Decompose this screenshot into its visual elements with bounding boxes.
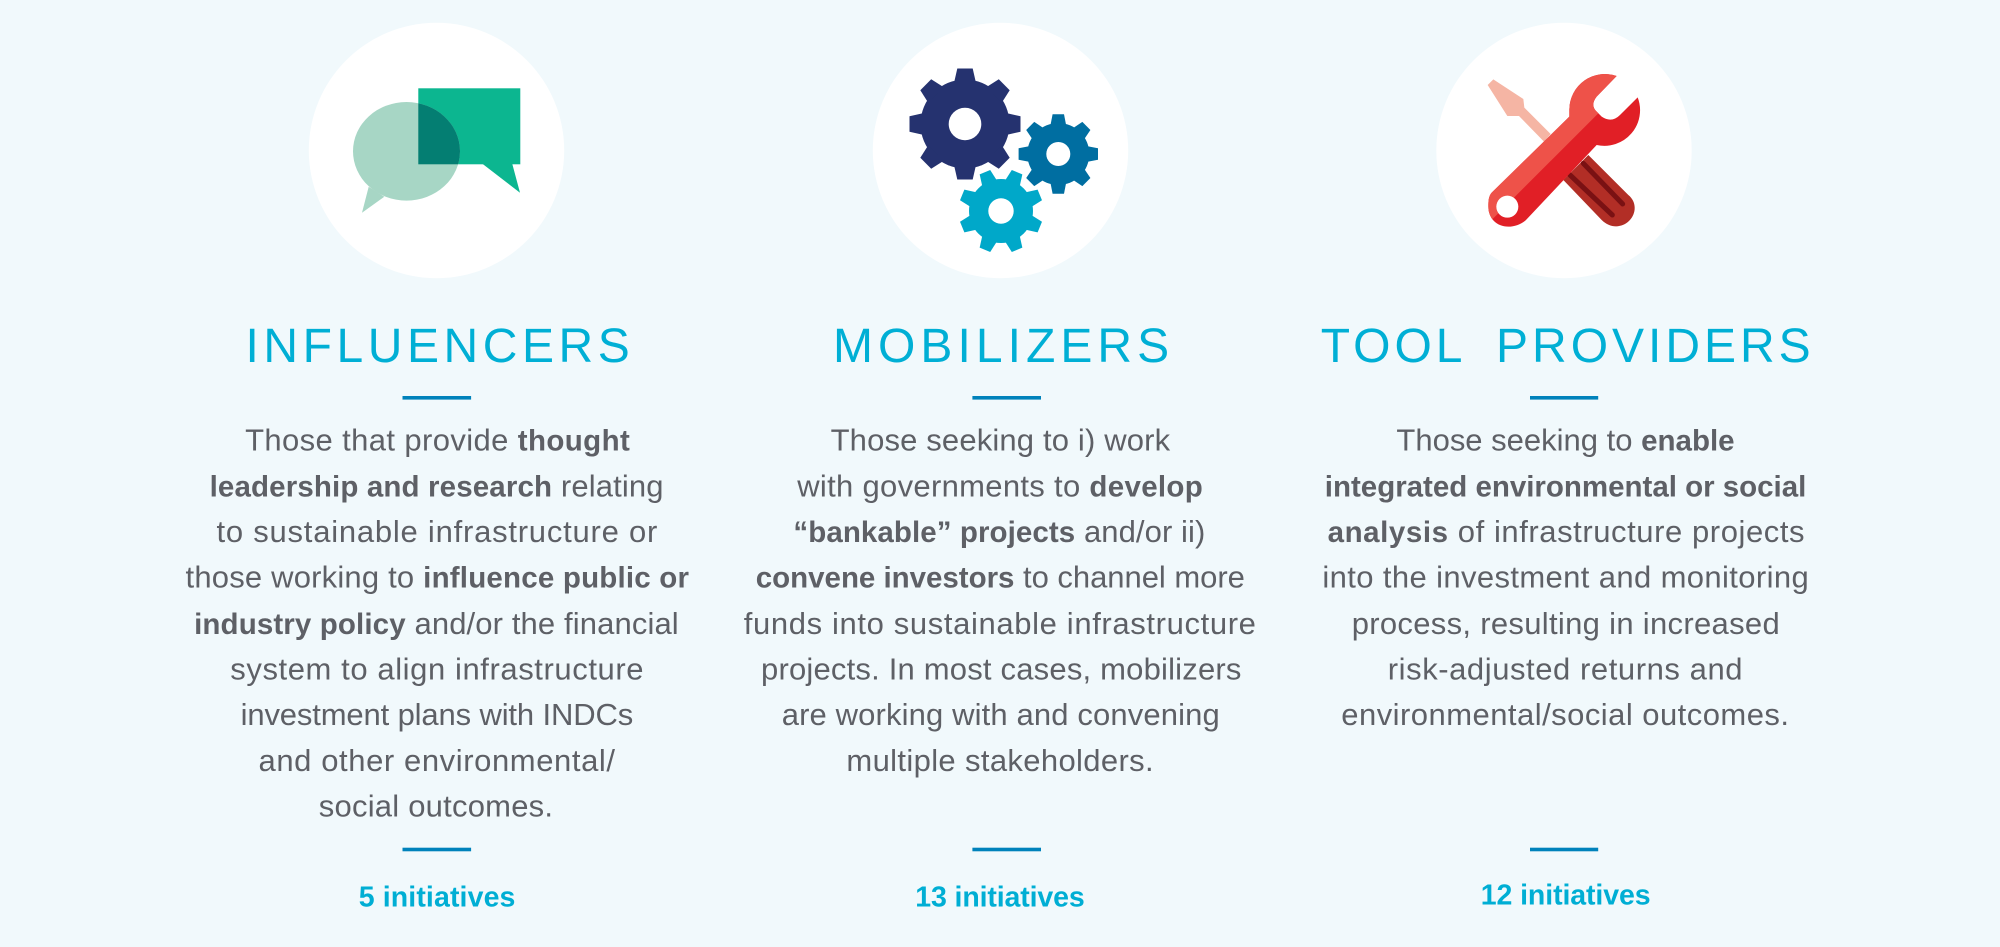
text block: mobilizers description — [744, 423, 1256, 778]
text block: influencers description: those working to influence public or — [186, 560, 690, 594]
text block: tool providers description — [1322, 423, 1809, 732]
heading: influencers: INFLUENCERS — [246, 320, 630, 373]
text block: influencers description: investment plans with INDCs — [241, 697, 633, 732]
icon: gears — [873, 23, 1128, 278]
screwdriver tip and shaft — [1488, 79, 1551, 142]
text block: influencers description: leadership and research relating — [210, 469, 664, 504]
icon: speech bubbles — [309, 23, 564, 278]
count: 5 initiatives: 5 initiatives — [359, 882, 515, 914]
text block: influencers description: system to align infrastructure — [230, 651, 644, 686]
text block: mobilizers description: funds into sustainable infrastructure — [744, 606, 1256, 641]
text block: influencers description: to sustainable infrastructure or — [216, 514, 657, 549]
text block: mobilizers description: are working with and convening — [782, 697, 1220, 732]
panel: mobilizers — [744, 23, 1256, 914]
large navy gear — [910, 68, 1020, 180]
text block: influencers description: Those that provide thought — [245, 423, 630, 458]
text block: mobilizers description: convene investors to channel more — [756, 560, 1245, 594]
text block: influencers description: industry policy and/or the financial — [194, 606, 679, 641]
heading: tool providers: TOOL PROVIDERS — [1321, 320, 1811, 373]
wrench — [1488, 74, 1640, 227]
icon: wrench and screwdriver — [1436, 23, 1692, 278]
text block: tool providers description: Those seeking to enable — [1396, 423, 1735, 458]
panel: influencers — [186, 23, 690, 914]
panel: tool providers — [1321, 23, 1811, 911]
text block: influencers description: social outcomes. — [319, 789, 553, 824]
heading: mobilizers: MOBILIZERS — [833, 320, 1169, 373]
count: 12 initiatives: 12 initiatives — [1481, 879, 1651, 911]
small cyan gear — [959, 169, 1043, 253]
text block: tool providers description: risk-adjusted returns and — [1388, 651, 1742, 686]
text block: tool providers description: process, resulting in increased — [1352, 606, 1780, 641]
text block: tool providers description: environmental/social outcomes. — [1341, 697, 1789, 732]
screwdriver handle — [1563, 155, 1635, 226]
text block: tool providers description: integrated environmental or social — [1325, 471, 1806, 504]
text block: tool providers description: into the investment and monitoring — [1322, 560, 1809, 594]
text block: mobilizers description: Those seeking to i) work — [831, 423, 1171, 458]
text block: mobilizers description: “bankable” projects and/or ii) — [793, 514, 1205, 549]
text block: influencers description — [186, 423, 690, 824]
text block: mobilizers description: with governments to develop — [796, 469, 1203, 504]
text block: mobilizers description: multiple stakeholders. — [846, 743, 1154, 778]
text block: mobilizers description: projects. In most cases, mobilizers — [761, 651, 1241, 686]
count: 13 initiatives: 13 initiatives — [915, 882, 1085, 914]
text block: influencers description: and other environmental/ — [258, 743, 615, 778]
text block: tool providers description: analysis of infrastructure projects — [1328, 514, 1804, 549]
medium blue gear — [1019, 114, 1098, 194]
